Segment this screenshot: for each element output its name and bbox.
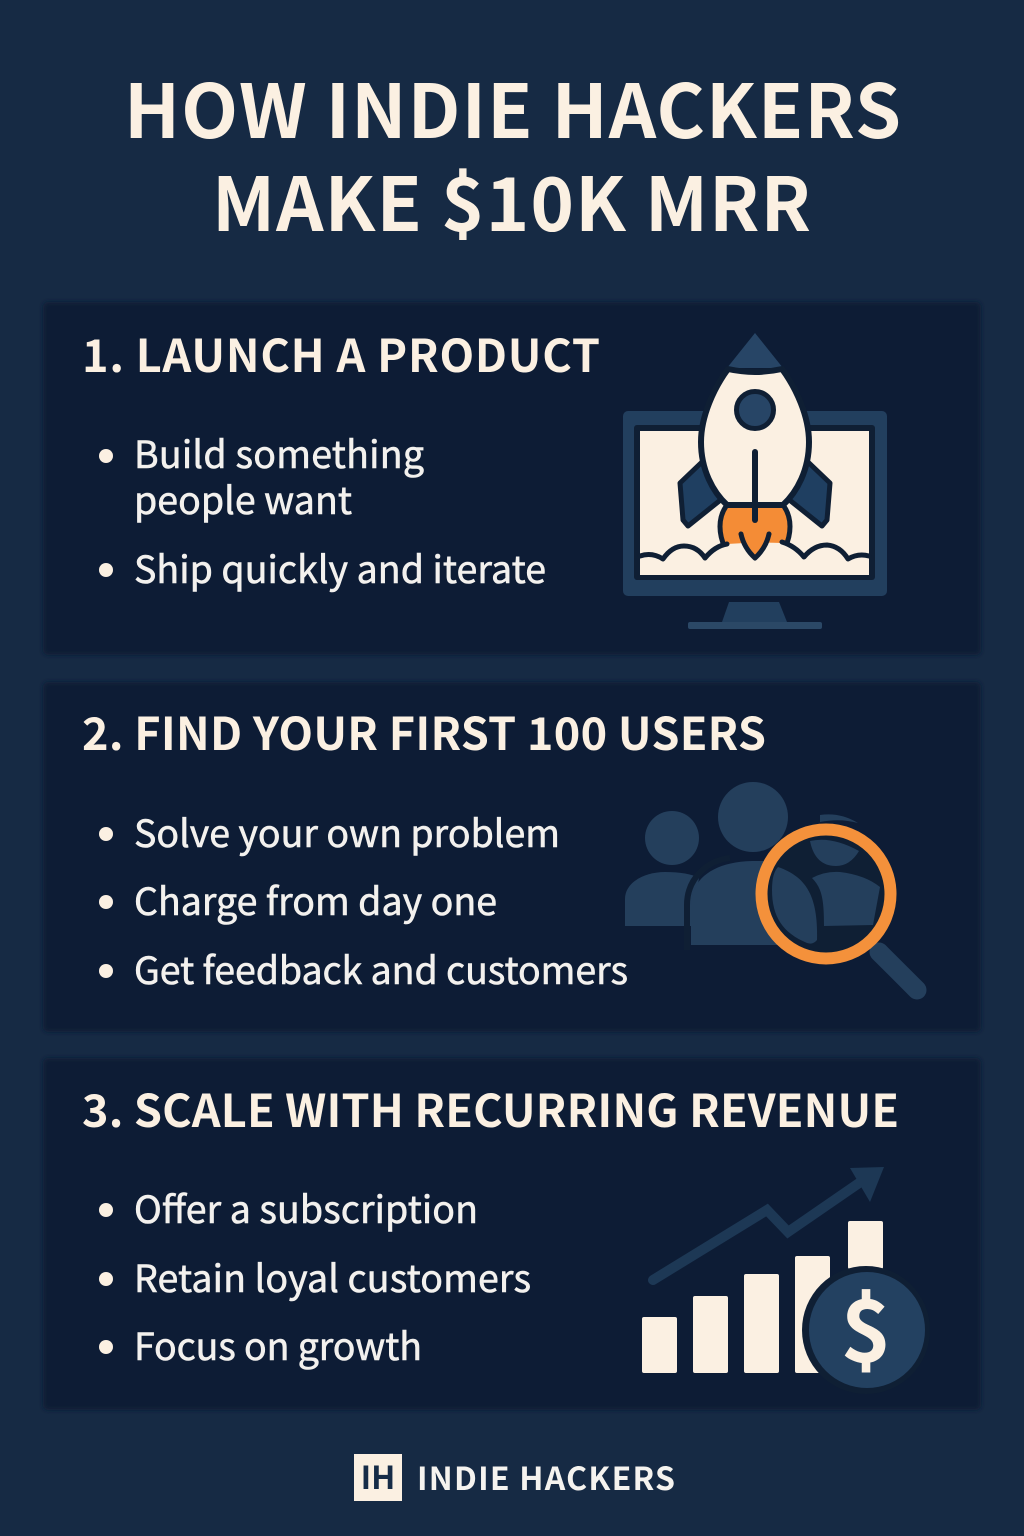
- bullet list: scale with recurring revenue: Focus on growth: [134, 1316, 422, 1371]
- bullet list: launch a product: people want: [134, 470, 352, 525]
- panel: scale with recurring revenue: [43, 1058, 981, 1410]
- bullet list: find your first 100 users: Charge from day one: [134, 871, 497, 926]
- bullet list: launch a product: [99, 424, 546, 594]
- bullet list: find your first 100 users: [99, 803, 628, 995]
- bullet list: launch a product: Build something: [134, 424, 424, 479]
- heading: launch a product: 1. LAUNCH A PRODUCT: [82, 320, 600, 385]
- icon: rocket launching from monitor: [623, 333, 887, 629]
- bullet list: find your first 100 users: Get feedback and customers: [134, 940, 628, 995]
- panel: find your first 100 users: [43, 682, 981, 1032]
- icon: users under magnifying glass: [625, 782, 917, 990]
- bullet list: scale with recurring revenue: [99, 1179, 531, 1371]
- heading: scale with recurring revenue: 3. SCALE WITH RECURRING REVENUE: [82, 1075, 899, 1140]
- icon: growth bars with dollar coin: [642, 1167, 930, 1394]
- title: HOW INDIE HACKERS: [124, 53, 901, 160]
- title: [124, 53, 901, 253]
- footer brand: [354, 1453, 675, 1501]
- bullet list: scale with recurring revenue: Offer a subscription: [134, 1179, 478, 1234]
- heading: find your first 100 users: 2. FIND YOUR FIRST 100 USERS: [82, 698, 766, 763]
- bullet list: scale with recurring revenue: Retain loyal customers: [134, 1248, 531, 1303]
- bullet list: find your first 100 users: Solve your own problem: [134, 803, 560, 858]
- icon: IH logo: IH: [361, 1453, 395, 1499]
- bullet list: launch a product: Ship quickly and iterate: [134, 539, 546, 594]
- panel: launch a product: [43, 302, 981, 655]
- brand name: INDIE HACKERS: [417, 1454, 675, 1500]
- title: MAKE $10K MRR: [212, 146, 811, 253]
- icon: growth bars with dollar coin: $: [841, 1262, 891, 1387]
- icon: IH logo: [354, 1453, 402, 1501]
